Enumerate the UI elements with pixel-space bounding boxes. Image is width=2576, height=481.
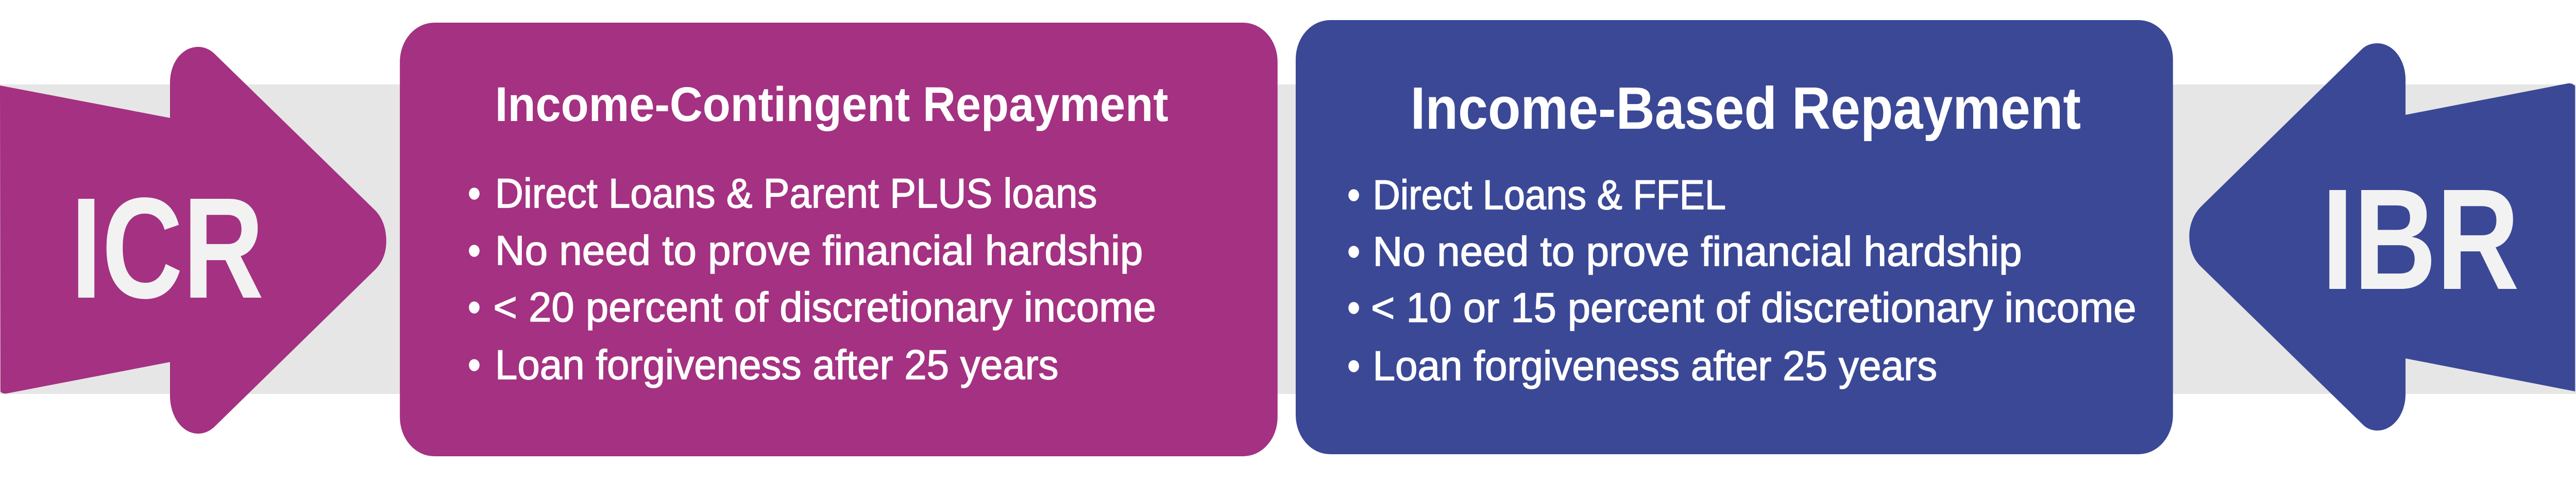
arrow: ICR pointing right bbox=[0, 47, 386, 434]
bullet list: IBR features: • bbox=[1347, 343, 1360, 389]
bullet list: ICR features: • bbox=[468, 342, 481, 388]
heading: income-contingent repayment: Income-Contingent Repayment bbox=[495, 77, 1168, 131]
bullet list: ICR features: Direct Loans & Parent PLUS loans bbox=[495, 170, 1097, 217]
bullet list: ICR features: < 20 percent of discretionary income bbox=[493, 284, 1156, 331]
background band bbox=[0, 84, 2576, 394]
bullet list: ICR features: • bbox=[468, 284, 481, 331]
bullet list: ICR features: Loan forgiveness after 25 years bbox=[495, 342, 1059, 388]
bullet list: IBR features: Direct Loans & FFEL bbox=[1373, 172, 1726, 218]
bullet list: ICR features: • bbox=[468, 228, 481, 274]
bullet list: ICR features: • bbox=[468, 170, 481, 217]
arrow: IBR pointing left bbox=[2189, 43, 2575, 431]
bullet list: IBR features: No need to prove financial hardship bbox=[1373, 229, 2022, 275]
panel: income-based repayment bbox=[1296, 20, 2173, 454]
bullet list: IBR features bbox=[1347, 172, 2136, 389]
bullet list: IBR features: • bbox=[1347, 229, 1360, 275]
bullet list: IBR features: • bbox=[1347, 285, 1360, 331]
arrow label: IBR: IBR bbox=[2321, 159, 2519, 319]
bullet list: ICR features bbox=[468, 170, 1156, 388]
bullet list: IBR features: • bbox=[1347, 172, 1360, 218]
bullet list: IBR features: < 10 or 15 percent of discretionary income bbox=[1371, 285, 2136, 331]
arrow label: ICR: ICR bbox=[71, 167, 264, 328]
bullet list: IBR features: Loan forgiveness after 25 years bbox=[1373, 343, 1937, 389]
heading: income-based repayment: Income-Based Repayment bbox=[1411, 75, 2081, 142]
panel: income-contingent repayment bbox=[400, 23, 1278, 456]
bullet list: ICR features: No need to prove financial hardship bbox=[495, 228, 1143, 274]
